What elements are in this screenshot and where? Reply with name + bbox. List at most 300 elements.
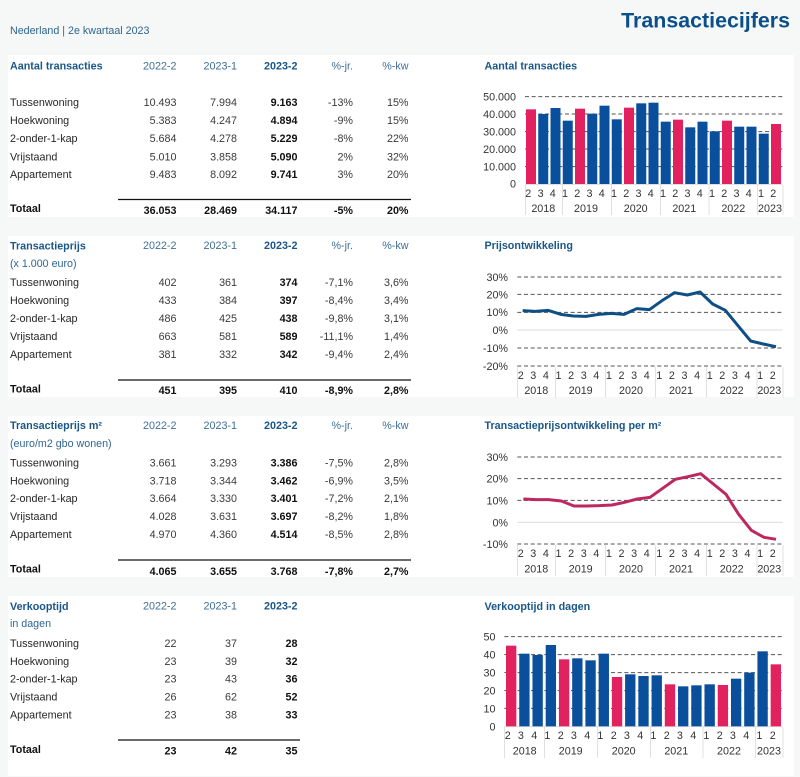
row: Vrijstaand	[10, 692, 298, 704]
row: Appartement: 9.483	[150, 169, 177, 181]
x axis labels: 3	[682, 370, 688, 382]
x axis labels: 2	[611, 730, 617, 742]
row: Totaal: 35	[286, 746, 298, 758]
row: Vrijstaand: 581	[219, 331, 237, 343]
row: Tussenwoning: -13%	[328, 97, 353, 109]
table: verkooptijd	[10, 600, 300, 758]
y axis labels	[484, 632, 496, 733]
row: Hoekwoning	[10, 295, 409, 307]
x axis labels: 3	[732, 370, 738, 382]
row: Totaal: 20%	[387, 205, 409, 217]
x axis labels: 1	[758, 188, 764, 200]
x axis labels: 2023	[758, 203, 782, 215]
table header: %-jr.	[332, 60, 353, 72]
y axis labels: 0%	[492, 325, 508, 337]
table header: (x 1.000 euro)	[10, 258, 77, 270]
row: Appartement: Appartement	[10, 169, 72, 181]
y axis labels: 0	[490, 721, 496, 733]
row: Hoekwoning	[10, 656, 298, 668]
row: Vrijstaand: 3.697	[271, 511, 298, 523]
x axis labels: 2	[770, 730, 776, 742]
y axis labels: 30%	[486, 272, 508, 284]
x axis labels: 2	[568, 548, 574, 560]
row: Hoekwoning: -8,4%	[325, 295, 353, 307]
row: Appartement	[10, 710, 298, 722]
x axis labels: 2018	[531, 203, 555, 215]
x axis labels: 1	[650, 730, 656, 742]
row: Totaal: 23	[165, 746, 177, 758]
row: Tussenwoning	[10, 458, 409, 470]
x axis labels: 4	[694, 548, 700, 560]
table header: 2022-2	[143, 600, 177, 612]
table header: 2023-1	[204, 240, 237, 252]
row: Appartement: 33	[286, 710, 298, 722]
x axis labels: 2020	[619, 564, 643, 576]
row: 2-onder-1-kap	[10, 674, 298, 686]
row: Hoekwoning: 3.462	[271, 476, 298, 488]
table header	[10, 600, 298, 630]
y axis labels: 40.000	[483, 109, 516, 121]
row: Appartement: 9.741	[271, 169, 298, 181]
x axis labels: 4	[644, 370, 650, 382]
row: Appartement: 332	[219, 349, 237, 361]
title: Transactiecijfers	[621, 8, 790, 32]
line chart: prijsontwikkeling	[483, 272, 783, 398]
row: Tussenwoning: Tussenwoning	[10, 458, 79, 470]
row: Vrijstaand: 4.028	[150, 511, 177, 523]
row: Tussenwoning: 3,6%	[384, 277, 409, 289]
row: Vrijstaand: 1,8%	[384, 511, 409, 523]
x axis labels: 1	[707, 370, 713, 382]
x axis labels: 1	[606, 370, 612, 382]
row: Tussenwoning: 9.163	[271, 97, 298, 109]
row: Appartement: Appartement	[10, 349, 72, 361]
row: 2-onder-1-kap	[10, 493, 409, 505]
x axis labels: 2019	[569, 385, 593, 397]
y axis labels: 10%	[486, 495, 508, 507]
y axis labels: -10%	[483, 343, 508, 355]
row: Totaal: 28.469	[204, 205, 237, 217]
row: Tussenwoning: 3.293	[210, 458, 237, 470]
row: Appartement: 8.092	[210, 169, 237, 181]
row: Totaal: -5%	[334, 205, 353, 217]
x axis labels: 4	[593, 370, 599, 382]
x axis labels	[518, 548, 781, 576]
row: Appartement: 3%	[337, 169, 353, 181]
row: Tussenwoning: 3.386	[271, 458, 298, 470]
table header: 2023-2	[264, 60, 298, 72]
row: 2-onder-1-kap: 2-onder-1-kap	[10, 493, 78, 505]
x axis labels: 4	[694, 370, 700, 382]
x axis labels: 2	[770, 548, 776, 560]
table: transactieprijs per m2	[10, 420, 411, 578]
row: Appartement: 23	[165, 710, 177, 722]
row: 2-onder-1-kap: 3.664	[150, 493, 177, 505]
table header: Transactieprijs m²	[10, 420, 102, 432]
row: 2-onder-1-kap: 4.278	[210, 133, 237, 145]
row: Totaal: 42	[225, 746, 237, 758]
row: 2-onder-1-kap: -8%	[334, 133, 353, 145]
row: 2-onder-1-kap: 5.229	[271, 133, 298, 145]
x axis labels: 4	[644, 548, 650, 560]
row: Totaal: 395	[219, 385, 237, 397]
row: Tussenwoning: 28	[286, 638, 298, 650]
row: 2-onder-1-kap: -7,2%	[325, 493, 353, 505]
row: 2-onder-1-kap: 23	[165, 674, 177, 686]
x axis labels: 4	[746, 188, 752, 200]
table header: %-jr.	[332, 420, 353, 432]
y axis labels: 10.000	[483, 162, 516, 174]
table header: 2023-1	[204, 600, 237, 612]
row: Appartement: 2,8%	[384, 529, 409, 541]
row: Hoekwoning: 384	[219, 295, 237, 307]
x axis labels: 2	[717, 730, 723, 742]
row: Totaal	[10, 203, 409, 217]
row: Vrijstaand	[10, 511, 409, 523]
x axis labels: 1	[707, 548, 713, 560]
x axis labels: 1	[606, 548, 612, 560]
x axis labels: 4	[543, 370, 549, 382]
row: Appartement: 4.970	[150, 529, 177, 541]
y axis labels: -10%	[483, 539, 508, 551]
row: Tussenwoning: Tussenwoning	[10, 97, 79, 109]
x axis labels: 3	[530, 548, 536, 560]
y axis labels: 30	[484, 668, 496, 680]
y axis labels: 20%	[486, 290, 508, 302]
x axis labels: 2	[669, 370, 675, 382]
x axis labels: 2	[669, 548, 675, 560]
y axis labels: 30.000	[483, 126, 516, 138]
x axis labels: 2020	[619, 385, 643, 397]
y axis labels: 20.000	[483, 144, 516, 156]
row: 2-onder-1-kap: -9,8%	[325, 313, 353, 325]
x axis labels: 3	[677, 730, 683, 742]
x axis labels: 2020	[612, 746, 636, 758]
x axis labels: 2	[518, 370, 524, 382]
x axis labels: 4	[599, 188, 605, 200]
table header: 2022-2	[143, 240, 177, 252]
x axis labels: 3	[538, 188, 544, 200]
row: Totaal	[10, 744, 298, 758]
row: Vrijstaand	[10, 331, 409, 343]
row: Hoekwoning: 39	[225, 656, 237, 668]
row: 2-onder-1-kap	[10, 313, 409, 325]
x axis labels: 4	[531, 730, 537, 742]
row: Tussenwoning: 2,8%	[384, 458, 409, 470]
row: Vrijstaand: 3.631	[210, 511, 237, 523]
x axis labels: 3	[685, 188, 691, 200]
x axis labels: 2	[619, 548, 625, 560]
row: Vrijstaand: -11,1%	[320, 331, 353, 343]
x axis labels: 2021	[669, 385, 693, 397]
x axis labels: 1	[556, 370, 562, 382]
row: Appartement: -8,5%	[325, 529, 353, 541]
panel: aantal transacties	[8, 55, 794, 217]
row: Hoekwoning: -9%	[334, 115, 353, 127]
x axis labels	[518, 370, 781, 397]
table header: %-kw	[382, 60, 409, 72]
x axis labels: 1	[656, 548, 662, 560]
row: Tussenwoning	[10, 97, 409, 109]
row: Hoekwoning: 15%	[387, 115, 409, 127]
row: Totaal: 2,7%	[384, 566, 409, 578]
x axis labels: 4	[690, 730, 696, 742]
bar chart: verkooptijd in dagen	[484, 632, 783, 758]
row: Vrijstaand: 52	[286, 692, 298, 704]
row: Appartement	[10, 169, 409, 181]
row: Totaal: 451	[159, 385, 177, 397]
row: 2-onder-1-kap: 43	[225, 674, 237, 686]
x axis labels: 2	[770, 188, 776, 200]
row: Appartement: Appartement	[10, 529, 72, 541]
x axis labels: 4	[593, 548, 599, 560]
x axis labels: 2022	[721, 203, 745, 215]
x axis labels: 2021	[672, 203, 696, 215]
x axis labels: 4	[543, 548, 549, 560]
y axis labels	[483, 92, 516, 190]
table header: 2023-2	[264, 600, 298, 612]
row: Hoekwoning	[10, 476, 409, 488]
x axis labels: 1	[709, 188, 715, 200]
table header: Verkooptijd	[10, 601, 69, 613]
y axis labels: 50.000	[483, 92, 516, 104]
row: Hoekwoning	[10, 115, 409, 127]
x axis labels: 2019	[574, 203, 598, 215]
row: Tussenwoning: -7,1%	[325, 277, 353, 289]
table header: (euro/m2 gbo wonen)	[10, 438, 112, 450]
y axis labels	[483, 272, 508, 373]
x axis labels: 4	[745, 370, 751, 382]
x axis labels	[505, 730, 781, 758]
row: Hoekwoning: 397	[280, 295, 298, 307]
row: Tussenwoning: 22	[165, 638, 177, 650]
x axis labels: 3	[587, 188, 593, 200]
row: Totaal: 2,8%	[384, 385, 409, 397]
row: Vrijstaand: 32%	[387, 152, 409, 164]
y axis labels: 10%	[486, 307, 508, 319]
x axis labels: 3	[581, 548, 587, 560]
table header: 2023-2	[264, 240, 298, 252]
x axis labels: 1	[544, 730, 550, 742]
row: Totaal: 3.655	[210, 566, 237, 578]
y axis labels	[483, 452, 508, 551]
row: Totaal: Totaal	[10, 744, 41, 756]
row: Tussenwoning: 374	[280, 277, 298, 289]
x axis labels: 1	[556, 548, 562, 560]
y axis labels: 20%	[486, 474, 508, 486]
x axis labels: 3	[518, 730, 524, 742]
row: 2-onder-1-kap: 2,1%	[384, 493, 409, 505]
row: Vrijstaand: 62	[225, 692, 237, 704]
row: Appartement	[10, 349, 409, 361]
x axis labels: 2019	[559, 746, 583, 758]
row: Vrijstaand: Vrijstaand	[10, 511, 57, 523]
x axis labels: 3	[734, 188, 740, 200]
x axis labels: 2019	[569, 564, 593, 576]
row: Appartement: -9,4%	[325, 349, 353, 361]
row: Totaal: Totaal	[10, 203, 41, 215]
row: Tussenwoning: -7,5%	[325, 458, 353, 470]
x axis labels: 2022	[717, 746, 741, 758]
x axis labels: 4	[584, 730, 590, 742]
x axis labels: 1	[562, 188, 568, 200]
x axis labels: 2	[721, 188, 727, 200]
table header: 2023-1	[204, 420, 237, 432]
row: Hoekwoning: Hoekwoning	[10, 656, 69, 668]
table header: %-jr.	[332, 240, 353, 252]
row: 2-onder-1-kap: 425	[219, 313, 237, 325]
row: Hoekwoning: 32	[286, 656, 298, 668]
subtitle: region and quarter: Nederland | 2e kwartaal 2023	[10, 25, 149, 37]
row: Totaal: Totaal	[10, 384, 41, 396]
chart heading: verkooptijd in dagen: Verkooptijd in dagen	[484, 601, 590, 613]
table header: 2023-2	[264, 420, 298, 432]
x axis labels: 2020	[624, 203, 648, 215]
y axis labels: 20	[484, 686, 496, 698]
row: Tussenwoning: 15%	[387, 97, 409, 109]
table header: 2022-2	[143, 60, 177, 72]
bar chart: aantal transacties	[483, 92, 783, 215]
y axis labels: 10	[484, 703, 496, 715]
row: Totaal: 410	[280, 385, 298, 397]
x axis labels	[525, 188, 782, 215]
row: Appartement: 20%	[387, 169, 409, 181]
x axis labels: 2	[623, 188, 629, 200]
row: Totaal: Totaal	[10, 564, 41, 576]
x axis labels: 2023	[757, 746, 781, 758]
table header: in dagen	[10, 618, 51, 630]
x axis labels: 4	[745, 548, 751, 560]
x axis labels: 1	[757, 548, 763, 560]
row: Appartement: 4.360	[210, 529, 237, 541]
x axis labels: 3	[624, 730, 630, 742]
row: Vrijstaand	[10, 152, 409, 164]
row: Totaal: -8,9%	[325, 385, 353, 397]
y axis labels: -20%	[483, 361, 508, 373]
row: Tussenwoning: 10.493	[144, 97, 177, 109]
row: Vrijstaand: 3.858	[210, 152, 237, 164]
row: 2-onder-1-kap: 36	[286, 674, 298, 686]
y axis labels: 40	[484, 650, 496, 662]
row: Appartement: 381	[159, 349, 177, 361]
row: Hoekwoning: 4.247	[210, 115, 237, 127]
row: 2-onder-1-kap: 486	[159, 313, 177, 325]
panel: transactieprijs per m2	[8, 416, 794, 578]
x axis labels: 3	[631, 548, 637, 560]
x axis labels: 2	[525, 188, 531, 200]
row: 2-onder-1-kap: 3.401	[271, 493, 298, 505]
row: Hoekwoning: 433	[159, 295, 177, 307]
x axis labels: 2	[505, 730, 511, 742]
chart heading: transactieprijsontwikkeling per m2: Transactieprijsontwikkeling per m²	[484, 420, 662, 432]
x axis labels: 2023	[757, 385, 781, 397]
x axis labels: 1	[597, 730, 603, 742]
row: Tussenwoning	[10, 638, 298, 650]
chart heading: prijsontwikkeling: Prijsontwikkeling	[484, 240, 573, 252]
x axis labels: 1	[656, 370, 662, 382]
x axis labels: 2023	[757, 564, 781, 576]
table: transactieprijs	[10, 240, 411, 397]
y axis labels: 50	[484, 632, 496, 644]
x axis labels: 2	[558, 730, 564, 742]
row: Tussenwoning: Tussenwoning	[10, 277, 79, 289]
row: Tussenwoning: 402	[159, 277, 177, 289]
table header: Transactieprijs	[10, 240, 86, 252]
x axis labels: 2	[664, 730, 670, 742]
row: Tussenwoning: 361	[219, 277, 237, 289]
row: Totaal: 4.065	[150, 566, 177, 578]
table header: %-kw	[382, 240, 409, 252]
row: Totaal	[10, 564, 409, 578]
x axis labels: 3	[682, 548, 688, 560]
row: Vrijstaand: 26	[165, 692, 177, 704]
table header: %-kw	[382, 420, 409, 432]
x axis labels: 4	[743, 730, 749, 742]
x axis labels: 2018	[524, 564, 548, 576]
row: Hoekwoning: 4.894	[271, 115, 298, 127]
table header	[10, 60, 409, 72]
panel: verkooptijd	[8, 596, 794, 776]
x axis labels: 3	[732, 548, 738, 560]
row: Tussenwoning: Tussenwoning	[10, 638, 79, 650]
row: Hoekwoning: Hoekwoning	[10, 115, 69, 127]
row: Totaal: -7,8%	[325, 566, 353, 578]
row: Appartement: 342	[280, 349, 298, 361]
x axis labels: 1	[757, 370, 763, 382]
x axis labels: 1	[660, 188, 666, 200]
row: Vrijstaand: 5.010	[150, 152, 177, 164]
y axis labels: 30%	[486, 452, 508, 464]
row: Hoekwoning: Hoekwoning	[10, 476, 69, 488]
line chart: transactieprijsontwikkeling per m2	[483, 452, 783, 576]
table header	[10, 240, 409, 270]
row: 2-onder-1-kap: 2-onder-1-kap	[10, 674, 78, 686]
x axis labels: 2	[672, 188, 678, 200]
table header	[10, 420, 409, 450]
x axis labels: 2	[568, 370, 574, 382]
row: Totaal: 3.768	[271, 566, 298, 578]
x axis labels: 2018	[513, 746, 537, 758]
row: Appartement: 2,4%	[384, 349, 409, 361]
x axis labels: 3	[636, 188, 642, 200]
row: 2-onder-1-kap: 3,1%	[384, 313, 409, 325]
row: Hoekwoning: Hoekwoning	[10, 295, 69, 307]
x axis labels: 1	[756, 730, 762, 742]
row: Hoekwoning: 3,5%	[384, 476, 409, 488]
row: 2-onder-1-kap: 22%	[387, 133, 409, 145]
row: Hoekwoning: -6,9%	[325, 476, 353, 488]
y axis labels: 0	[510, 178, 516, 190]
x axis labels: 4	[648, 188, 654, 200]
row: Tussenwoning: 7.994	[210, 97, 237, 109]
row: 2-onder-1-kap	[10, 133, 409, 145]
x axis labels: 2	[518, 548, 524, 560]
panel: transactieprijs	[8, 236, 794, 398]
row: 2-onder-1-kap: 3.330	[210, 493, 237, 505]
table header: 2022-2	[143, 420, 177, 432]
row: Tussenwoning: 37	[225, 638, 237, 650]
x axis labels: 2022	[720, 564, 744, 576]
row: Vrijstaand: Vrijstaand	[10, 692, 57, 704]
x axis labels: 2	[770, 370, 776, 382]
row: Totaal: 36.053	[144, 205, 177, 217]
x axis labels: 2021	[669, 564, 693, 576]
row: Vrijstaand: 2%	[337, 152, 353, 164]
row: Vrijstaand: 5.090	[271, 152, 298, 164]
x axis labels: 2018	[524, 385, 548, 397]
x axis labels: 2	[719, 548, 725, 560]
row: Hoekwoning: 3.344	[210, 476, 237, 488]
